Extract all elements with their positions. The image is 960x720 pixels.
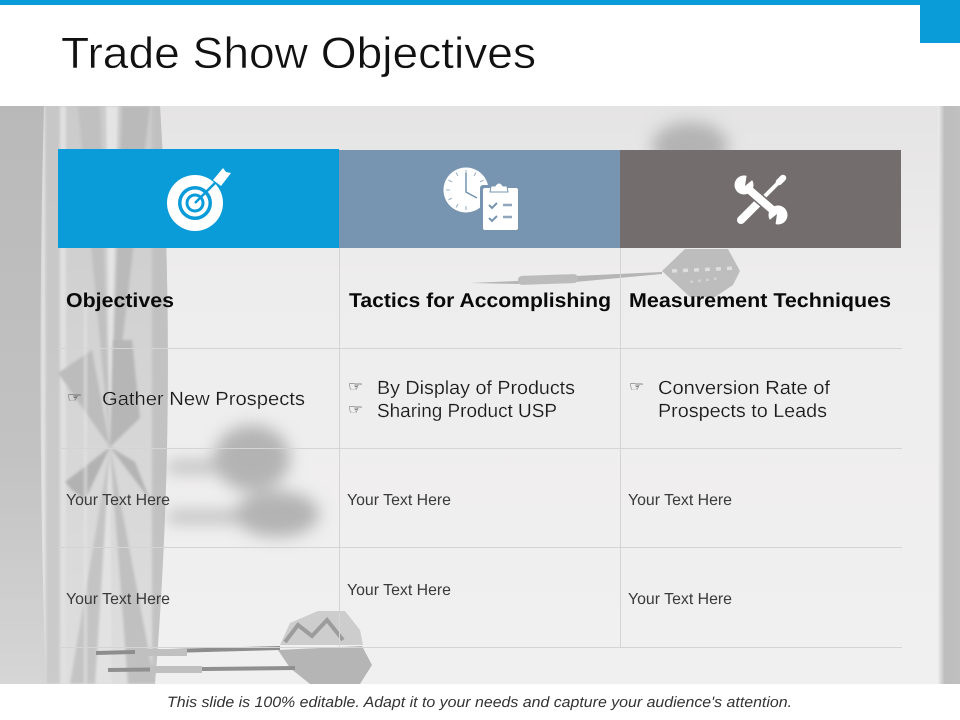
row: bullet points: ☞ xyxy=(348,379,363,395)
header cell: measurement xyxy=(620,150,901,248)
column headings: Tactics for Accomplishing xyxy=(349,290,611,312)
dart shadows xyxy=(168,122,728,537)
row: bullet points: ☞ xyxy=(629,379,644,395)
icon: clock and clipboard xyxy=(444,168,521,233)
icon: crossed wrench and screwdriver xyxy=(734,173,788,228)
row: placeholder text: Your Text Here xyxy=(628,492,732,509)
top accent bar xyxy=(0,0,960,5)
icon: target with dart xyxy=(167,168,231,231)
row: placeholder text xyxy=(66,492,732,509)
row: bullet points: ☞ xyxy=(67,390,82,406)
row: placeholder text lower xyxy=(66,582,732,608)
row: bullet points: ☞ xyxy=(348,402,363,418)
row: placeholder text lower: Your Text Here xyxy=(66,591,170,608)
column headings xyxy=(66,290,891,312)
row: placeholder text: Your Text Here xyxy=(347,492,451,509)
row: bullet points: Gather New Prospects xyxy=(102,389,305,410)
row: bullet points: By Display of Products xyxy=(377,378,575,399)
header cell: tactics xyxy=(339,150,620,248)
row: placeholder text: Your Text Here xyxy=(66,492,170,509)
upper dart xyxy=(470,249,740,297)
column headings: Objectives xyxy=(66,290,174,312)
column headings: Measurement Techniques xyxy=(629,290,891,312)
row: bullet points: Prospects to Leads xyxy=(658,401,827,422)
row: bullet points: Conversion Rate of xyxy=(658,378,831,399)
row: placeholder text lower: Your Text Here xyxy=(347,582,451,599)
corner accent square xyxy=(920,0,960,43)
row: placeholder text lower: Your Text Here xyxy=(628,591,732,608)
table xyxy=(58,149,902,648)
title: Trade Show Objectives xyxy=(61,29,536,78)
row: bullet points: Sharing Product USP xyxy=(377,401,557,422)
header cell: objectives xyxy=(58,149,339,248)
footer note: This slide is 100% editable. Adapt it to your needs and capture your audience's attention. xyxy=(167,694,792,711)
lower darts xyxy=(96,611,372,684)
row: bullet points xyxy=(67,378,831,422)
grid lines xyxy=(58,248,902,648)
